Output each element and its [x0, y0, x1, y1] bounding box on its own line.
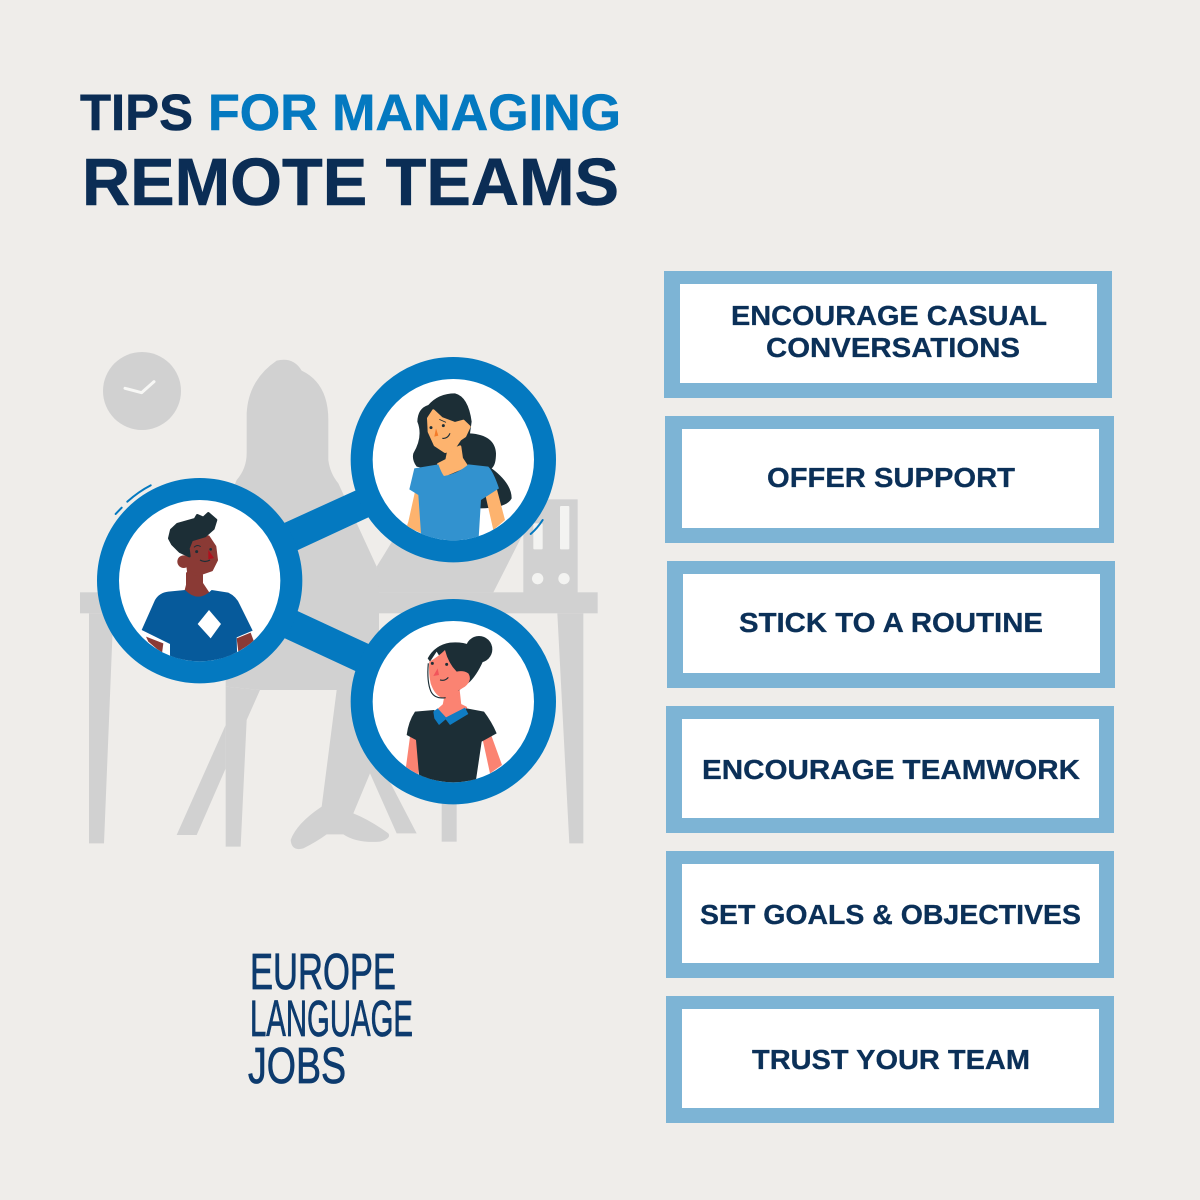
tip: set goals and objectives: SET GOALS & OBJECTIVES: [700, 899, 1081, 930]
tip: offer support: [665, 416, 1114, 543]
tip: set goals and objectives: [666, 851, 1114, 978]
logo: Europe Language Jobs: [248, 943, 413, 1094]
logo: Europe Language Jobs: EUROPE: [250, 943, 396, 1000]
tip: stick to a routine: STICK TO A ROUTINE: [739, 607, 1043, 638]
tip: stick to a routine: [667, 561, 1115, 688]
tip: encourage casual conversations: [664, 271, 1112, 398]
tip: encourage casual conversations: ENCOURAGE CASUAL: [731, 300, 1047, 331]
avatar: woman with long hair: [362, 368, 545, 551]
avatar: woman with bun: [362, 610, 545, 793]
tip: trust your team: TRUST YOUR TEAM: [752, 1044, 1030, 1075]
avatar: man: [108, 489, 291, 672]
logo: Europe Language Jobs: LANGUAGE: [250, 990, 413, 1047]
tip: encourage teamwork: [666, 706, 1114, 833]
network connectors: [283, 490, 370, 672]
illustration: remote team network: [80, 352, 598, 849]
silhouette: person at desk: [80, 352, 598, 849]
title: REMOTE TEAMS: [82, 145, 619, 220]
title: TIPS: [80, 84, 193, 141]
title: FOR MANAGING: [208, 84, 621, 141]
tip: offer support: OFFER SUPPORT: [767, 462, 1015, 493]
tip: encourage casual conversations: CONVERSATIONS: [766, 332, 1020, 363]
tip: encourage teamwork: ENCOURAGE TEAMWORK: [702, 754, 1080, 785]
accent dashes: [116, 485, 543, 534]
logo: Europe Language Jobs: JOBS: [248, 1037, 346, 1094]
tip: trust your team: [666, 996, 1114, 1123]
title: [80, 84, 621, 220]
